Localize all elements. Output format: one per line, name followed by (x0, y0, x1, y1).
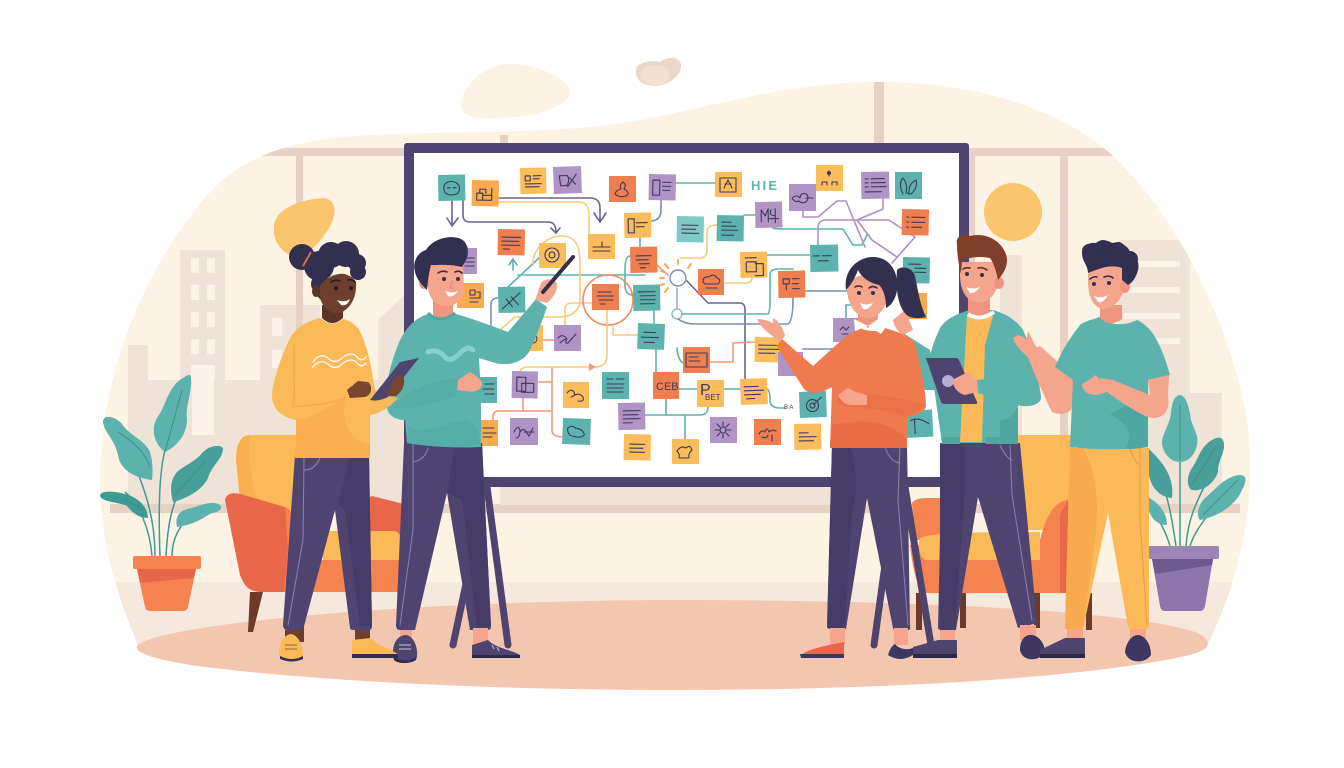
sticky note orange lines (498, 229, 525, 255)
sticky note purple list (649, 174, 676, 200)
sticky note purple doodle (553, 166, 582, 194)
shoes (393, 635, 520, 663)
sticky note teal partly hidden (903, 257, 930, 283)
collar (854, 316, 886, 334)
sticky note orange chart (472, 180, 499, 206)
sticky note teal behind arm (480, 377, 497, 403)
sticky note purple doodle (554, 325, 581, 351)
background room blob (90, 70, 1260, 670)
whiteboard frame (404, 143, 969, 487)
sticky note yellow with text: BET (705, 393, 721, 402)
neck (858, 308, 878, 328)
sweater zigzag (312, 354, 366, 368)
raised arm (1027, 346, 1076, 414)
city buildings left (128, 250, 404, 505)
sticky note orange lines (630, 247, 657, 273)
left armchair (225, 435, 406, 642)
sweater (777, 328, 926, 448)
sticky note teal chart (498, 287, 525, 313)
sticky note yellow lines (588, 234, 615, 259)
whiteboard surface (414, 153, 959, 477)
sweater hem (295, 448, 370, 458)
shoes (800, 642, 913, 659)
raised hand (757, 318, 785, 342)
head (319, 274, 356, 313)
pants (396, 443, 491, 630)
sticky note orange cloud (698, 269, 724, 295)
person: man in teal t-shirt (1013, 240, 1170, 661)
pot right (1148, 546, 1219, 611)
sticky note teal chart (904, 410, 933, 438)
sweater hem (830, 441, 907, 448)
sticky note teal lines (637, 323, 665, 350)
sticky note teal text (602, 372, 629, 399)
small connector label: B A (784, 405, 793, 411)
sticky note purple list (861, 172, 889, 199)
hand on chest (457, 372, 482, 392)
pot left (133, 556, 201, 611)
face details (963, 268, 987, 293)
lower wall band (90, 582, 1260, 652)
city buildings right (1000, 240, 1222, 505)
plant right (1147, 395, 1246, 611)
hand on tablet (952, 372, 977, 395)
hair (289, 241, 366, 302)
sticky note yellow lines (755, 337, 782, 362)
teal handwritten label: HIE (751, 178, 777, 193)
sticky note purple sun (710, 417, 737, 443)
neck (1100, 305, 1122, 323)
sticky note teal doodle (438, 175, 465, 201)
sticky note yellow behind body (480, 420, 498, 446)
sweater (272, 318, 398, 458)
sticky note yellow frame (715, 172, 742, 197)
sticky note purple doodle (755, 202, 782, 228)
hair (1082, 240, 1139, 285)
sticky note purple shapes (512, 371, 538, 398)
face details (1090, 276, 1113, 302)
plant left (100, 375, 223, 611)
sticky note teal lines (633, 285, 660, 311)
sticky note yellow lines (794, 424, 821, 450)
pants (283, 455, 372, 630)
raised hand (535, 279, 557, 303)
head (960, 262, 998, 302)
whiteboard (404, 143, 969, 645)
sun circle (984, 183, 1042, 241)
window frame (110, 82, 1240, 513)
sticky note yellow behind arm (525, 325, 543, 351)
sticky note teal target (799, 391, 827, 418)
face details (855, 286, 877, 309)
hand on chest (347, 381, 371, 398)
shoes (913, 635, 1045, 659)
flow connectors (447, 183, 915, 439)
sticky note orange behind ponytail (905, 293, 927, 319)
sleeve (977, 378, 1041, 406)
person: woman in orange sweater (757, 257, 926, 659)
hair (414, 237, 468, 290)
sticky note yellow icons (816, 165, 843, 191)
face details (438, 271, 462, 296)
person: woman in yellow sweater (272, 241, 419, 662)
raised hand (1013, 331, 1040, 358)
forearm (1100, 375, 1169, 418)
sticky note orange with text (653, 372, 679, 399)
sticky note orange list (902, 209, 929, 235)
sticky note yellow doodle (672, 439, 699, 464)
sticky note orange card (683, 347, 710, 373)
floor (137, 600, 1208, 690)
sweater wave (428, 348, 473, 359)
neck (968, 296, 990, 317)
neck (322, 305, 343, 323)
t-shirt (1055, 317, 1170, 449)
sticky note purple behind woman (833, 318, 860, 342)
hand on tablet (387, 375, 404, 396)
sticky note purple doodle (510, 418, 538, 445)
head (428, 263, 464, 306)
sticky note orange text (778, 271, 805, 298)
sticky note light teal lines (677, 216, 704, 242)
ankles (1067, 629, 1146, 640)
sticky note orange doodle (609, 176, 636, 202)
marker (543, 257, 573, 292)
shoes (279, 634, 398, 662)
person: man in teal cardigan (893, 235, 1045, 659)
decorative tan blob (636, 58, 681, 86)
sticky note teal leaves (895, 172, 922, 199)
sticky note yellow target (539, 243, 566, 268)
decorative cloud blob (461, 64, 570, 118)
tablet (926, 358, 977, 404)
sticky note yellow doodle (563, 382, 589, 408)
sticky note yellow lines (624, 434, 651, 460)
sticky note purple doodle (789, 184, 816, 211)
sticky note orange with text: CEB (656, 381, 679, 393)
person: man in teal sweater pointing (386, 237, 573, 663)
sticky note yellow lines (520, 168, 546, 194)
hair tie (303, 252, 311, 266)
sticky note yellow with text (697, 380, 724, 407)
sticky note orange sketch (457, 283, 484, 308)
neck (433, 300, 453, 319)
sticky note orange text (592, 284, 619, 310)
ankles (940, 625, 1036, 642)
hair (846, 257, 897, 308)
sticky note purple lines (618, 403, 645, 430)
yellow shirt (960, 316, 993, 442)
back hand (893, 310, 913, 335)
ankles (400, 628, 488, 645)
sticky note yellow list (624, 213, 651, 238)
sticky note yellow with text: P (700, 382, 711, 399)
sticky note yellow lines (740, 378, 768, 405)
sticky note teal doodle (562, 418, 591, 445)
ankles (285, 630, 370, 645)
face details (331, 280, 355, 305)
hand on chest (1082, 375, 1107, 395)
yellow blob behind woman (274, 198, 335, 258)
sticky note purple behind man (463, 248, 477, 274)
pants (938, 443, 1037, 630)
tablet (370, 358, 419, 401)
shoes (1040, 635, 1151, 661)
sticky note yellow chart (740, 252, 767, 278)
head (847, 274, 889, 318)
pants (1065, 448, 1149, 629)
sticky note purple hidden (778, 352, 803, 376)
white collar (968, 312, 994, 318)
ponytail (897, 268, 926, 318)
head (1088, 265, 1124, 309)
hand on belly (838, 388, 867, 405)
sticky note teal text (717, 215, 744, 241)
pants (827, 445, 910, 630)
arm reaching behind (903, 333, 938, 390)
hair (957, 235, 1007, 280)
sticky note orange doodle (754, 419, 781, 445)
sticky note teal lines (810, 245, 838, 272)
ankles (830, 628, 908, 645)
cardigan (930, 310, 1041, 443)
sweater body and arm (386, 299, 547, 447)
whiteboard legs (453, 487, 931, 645)
right armchair (910, 435, 1092, 630)
